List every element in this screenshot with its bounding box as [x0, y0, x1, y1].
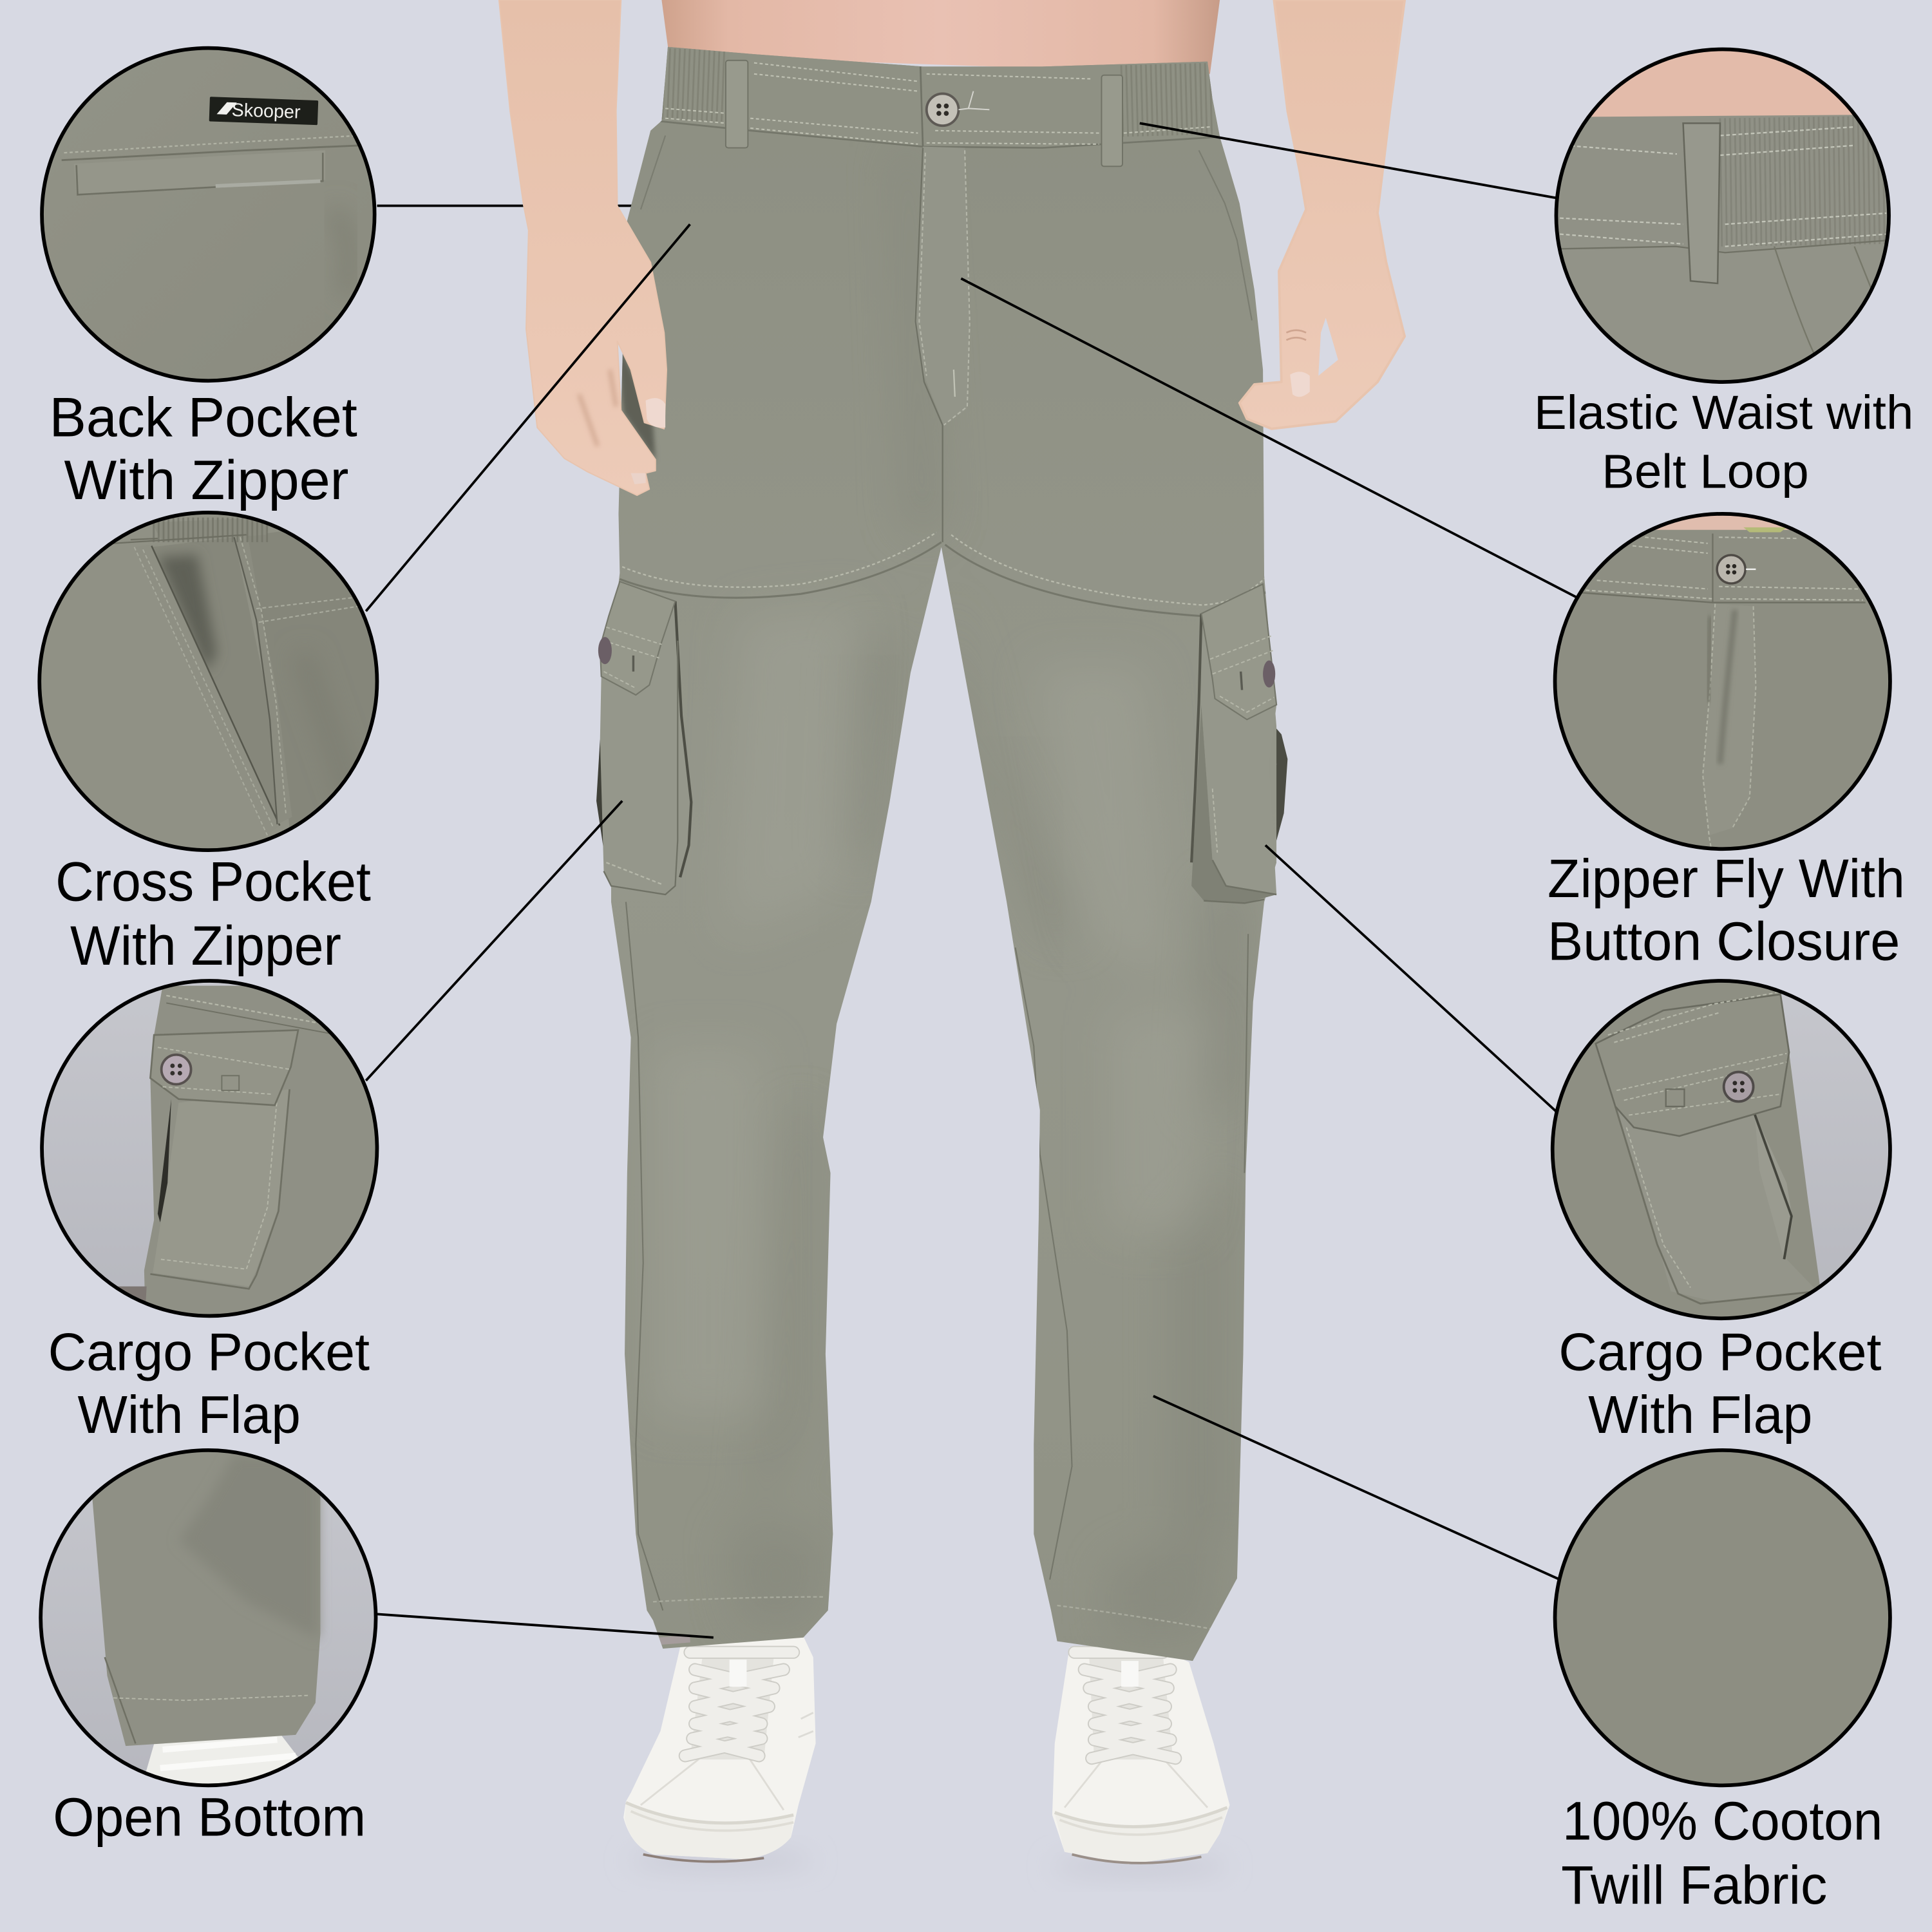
panel: cross pocket circle	[37, 510, 382, 855]
side seam lines	[626, 902, 1248, 1611]
flap	[600, 582, 675, 695]
second band	[234, 536, 292, 824]
seam right	[256, 598, 359, 622]
belt loop	[1683, 123, 1720, 283]
label: twill fabric line 2: Twill Fabric	[1561, 1855, 1827, 1915]
callout line: cross pocket	[366, 224, 690, 611]
callout line: right cargo pocket	[1265, 845, 1557, 1113]
button	[162, 1055, 191, 1084]
callout line: open bottom	[377, 1614, 714, 1638]
hem	[653, 1596, 1210, 1629]
button	[1263, 661, 1275, 688]
pocket bag	[151, 537, 277, 824]
brand label	[209, 97, 318, 125]
flap	[1596, 994, 1789, 1136]
right cargo pocket	[1191, 584, 1276, 903]
left shoe	[623, 1636, 816, 1862]
laces	[685, 1653, 793, 1756]
right panel	[248, 518, 382, 855]
label: elastic waist: Elastic Waist with	[1534, 385, 1913, 439]
trouser leg	[89, 1448, 320, 1746]
fly	[923, 147, 965, 148]
trousers	[579, 37, 1306, 1676]
label: right cargo pocket: Cargo Pocket	[1558, 1323, 1882, 1382]
panel: back pocket circle	[37, 43, 382, 388]
left arm and hand	[499, 0, 667, 495]
label: right cargo pocket line 2: With Flap	[1588, 1386, 1812, 1444]
label: open bottom: Open Bottom	[53, 1787, 366, 1848]
button	[1724, 1072, 1754, 1101]
label: cross pocket line 2: With Zipper	[70, 915, 341, 977]
pocket body	[153, 1089, 290, 1286]
shoe	[142, 1730, 308, 1786]
yoke seam	[620, 542, 1269, 616]
model photo: torso, trousers, hands and shoes	[377, 0, 1405, 1878]
label: elastic waist line 2: Belt Loop	[1602, 444, 1809, 498]
callout line: zipper fly	[961, 278, 1577, 598]
callout line: left cargo pocket	[366, 801, 622, 1081]
torso skin	[661, 0, 1220, 74]
left cargo pocket	[596, 582, 691, 895]
button	[598, 637, 612, 664]
outer dark gusset of right pocket	[1265, 716, 1287, 840]
side pocket edges	[641, 135, 1252, 320]
belt loops	[726, 61, 748, 148]
panel: elastic waist circle	[1553, 47, 1893, 386]
label: back pocket: Back Pocket	[50, 386, 357, 448]
panel: left cargo pocket circle	[37, 980, 382, 1325]
brand label: Skooper	[231, 100, 301, 123]
label: left cargo pocket: Cargo Pocket	[48, 1323, 370, 1382]
flap	[150, 1030, 298, 1105]
shadow beside left hand	[621, 354, 657, 459]
laces	[1074, 1653, 1175, 1758]
panel: twill fabric circle	[1550, 1448, 1895, 1793]
flap	[1201, 584, 1276, 719]
waist button	[927, 91, 989, 126]
panel: open bottom circle	[37, 1448, 382, 1793]
fold shading	[727, 148, 1251, 1639]
callout line behind arm: back pocket	[377, 205, 632, 207]
slit	[1754, 1114, 1793, 1259]
label: cross pocket: Cross Pocket	[55, 851, 371, 913]
first band	[135, 545, 279, 835]
label: twill fabric: 100% Cooton	[1562, 1791, 1882, 1852]
label: zipper fly line 2: Button Closure	[1548, 911, 1900, 971]
fly placket	[1703, 604, 1756, 835]
shoe shadows	[629, 1850, 1229, 1878]
panel: zipper fly circle	[1550, 511, 1895, 854]
button	[1717, 555, 1745, 583]
right shoe	[1052, 1647, 1229, 1864]
panel: right cargo pocket circle	[1550, 980, 1895, 1325]
callout line: elastic waist	[1140, 123, 1558, 198]
right arm and hand	[1240, 0, 1405, 429]
pocket body	[1615, 1106, 1817, 1301]
callout line: twill fabric	[1153, 1396, 1560, 1580]
label: left cargo pocket line 2: With Flap	[78, 1386, 301, 1444]
waistband	[661, 46, 1220, 137]
label: back pocket line 2: With Zipper	[64, 450, 348, 511]
slit	[158, 1099, 171, 1222]
label: zipper fly: Zipper Fly With	[1548, 848, 1905, 909]
elastic	[151, 518, 271, 542]
